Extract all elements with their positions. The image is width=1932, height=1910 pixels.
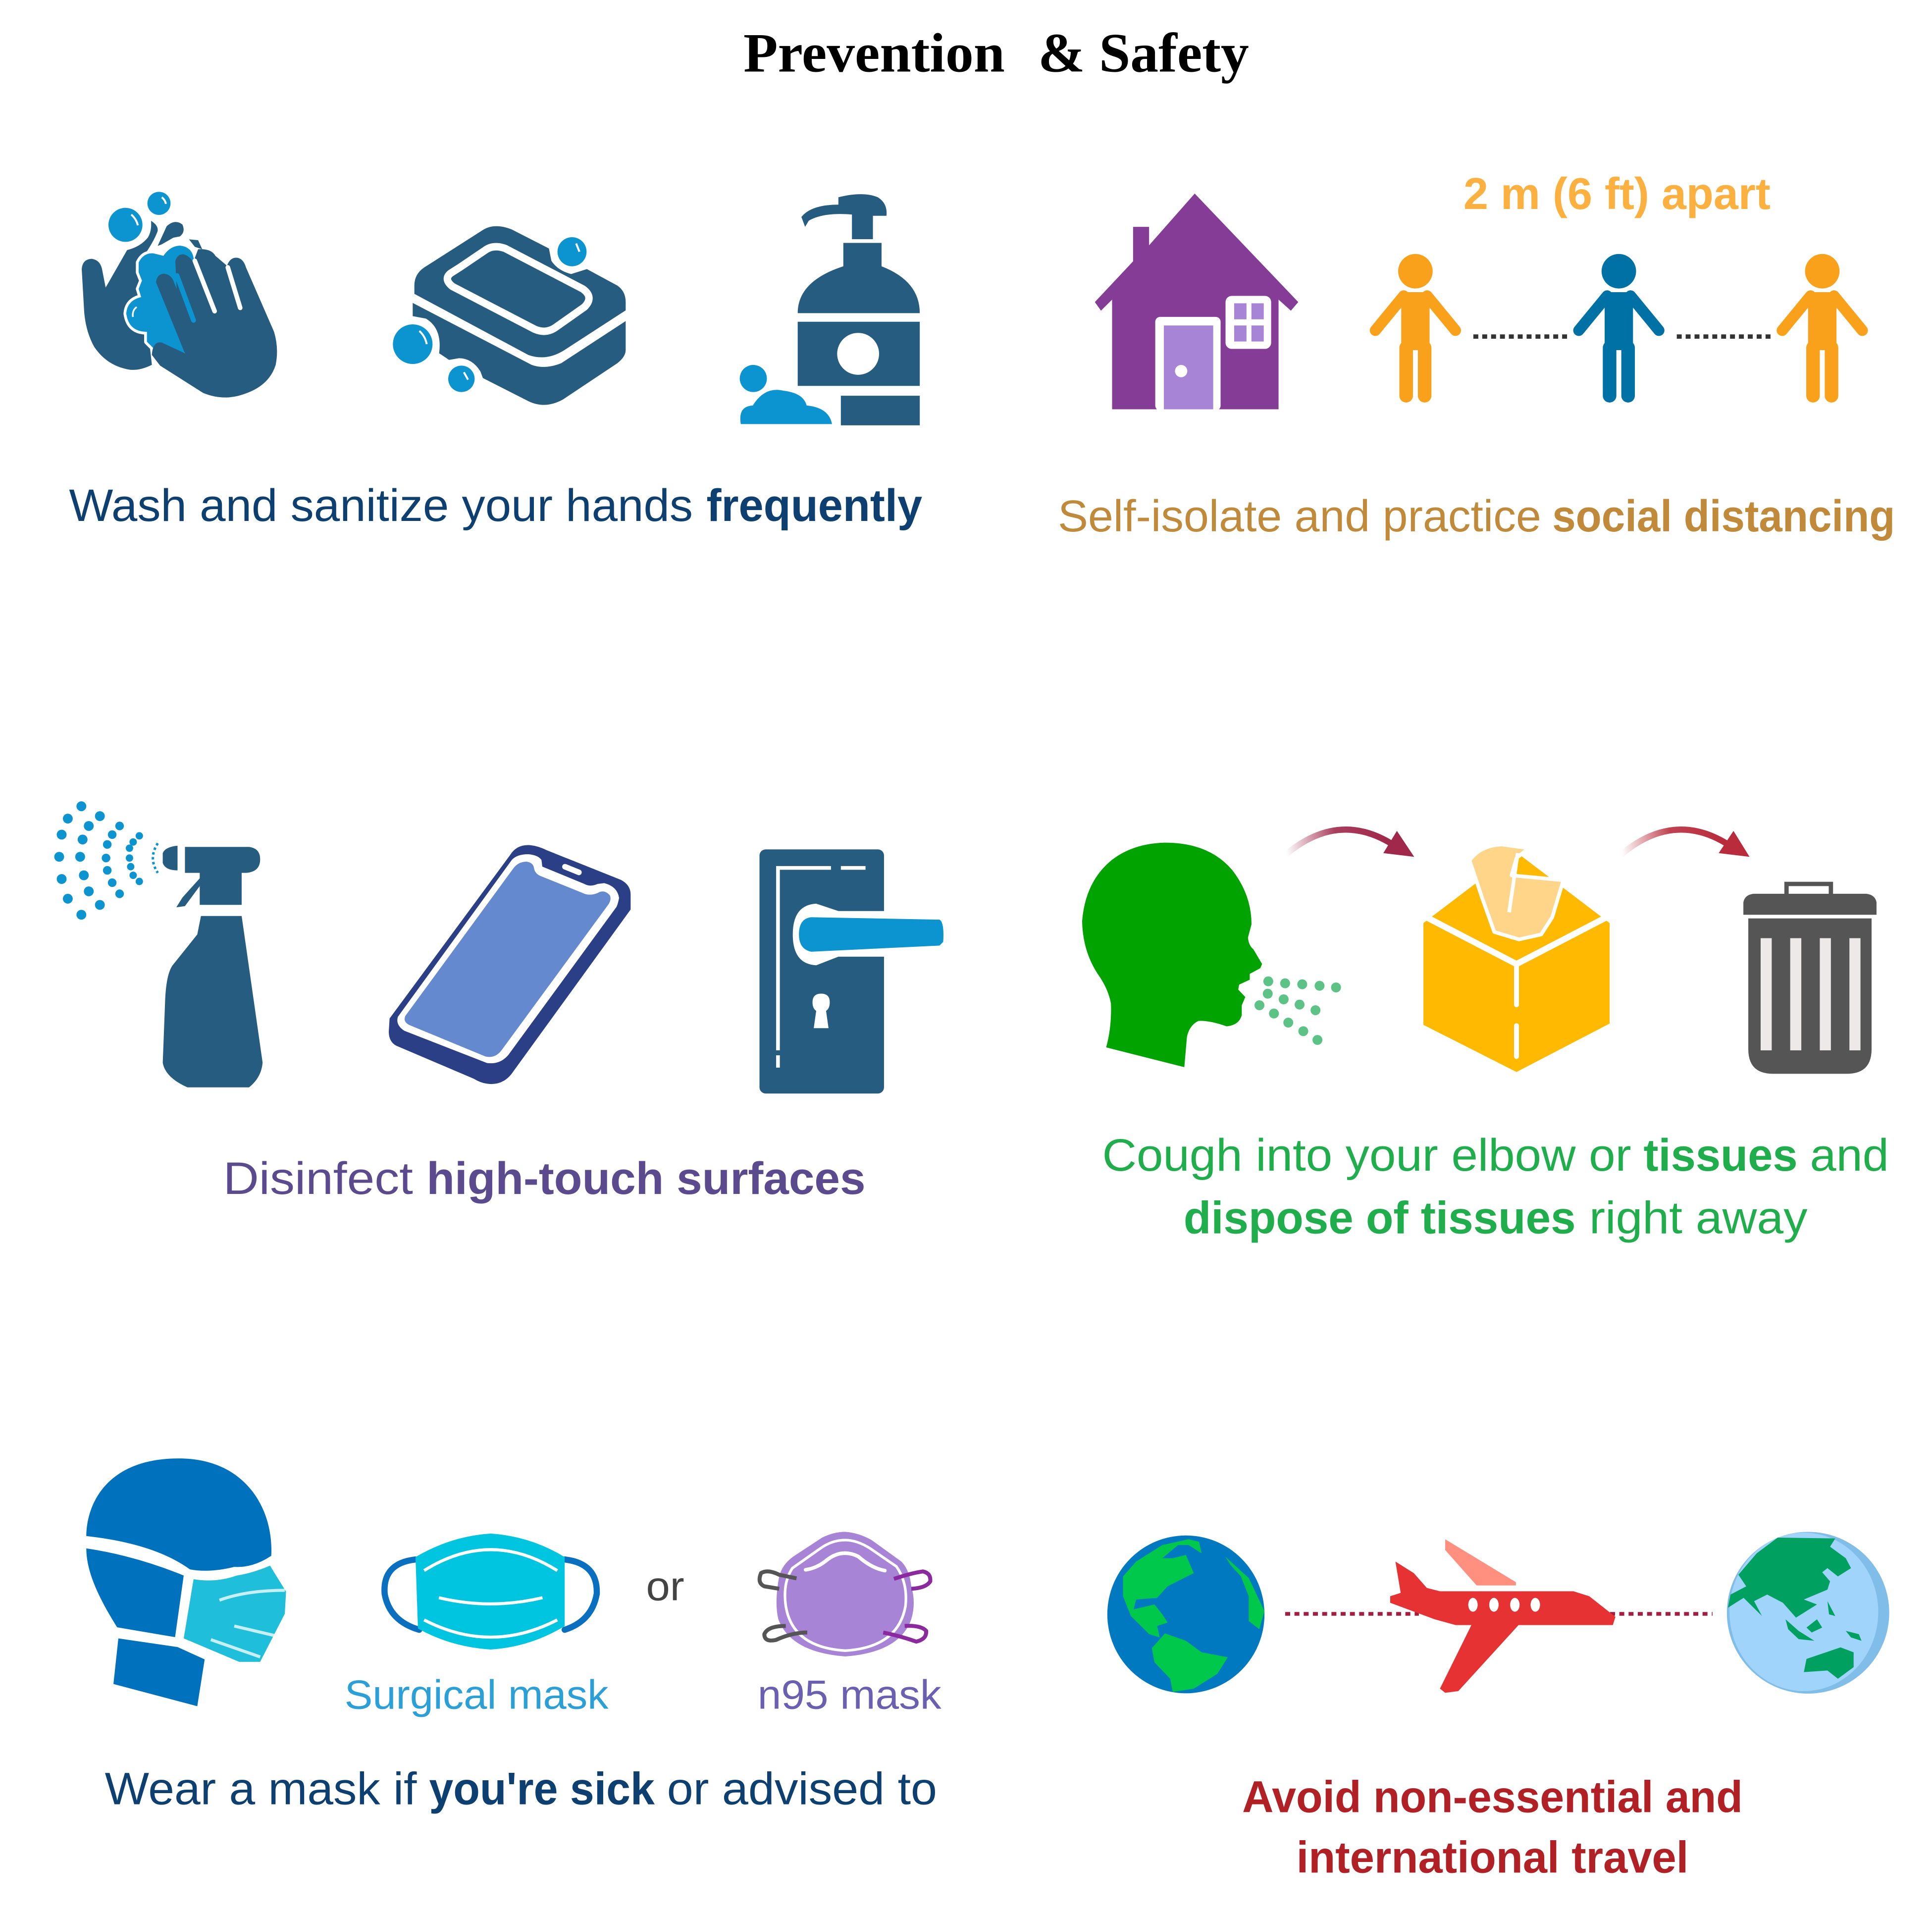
icon: coughing head (1082, 843, 1262, 1067)
caption: disinfect: Disinfect (223, 1153, 413, 1204)
icon: globe asia (1727, 1532, 1889, 1694)
caption: wear a mask: or advised to (667, 1763, 937, 1814)
icon: orange person right (1782, 254, 1862, 396)
icon: n95 mask (760, 1532, 930, 1656)
panel: social distancing (1058, 169, 1895, 541)
panel: disinfect (54, 801, 943, 1204)
caption: wash hands: Wash and sanitize your hands (69, 480, 693, 531)
route line left (1285, 1613, 1419, 1614)
caption: cough (1102, 1130, 1889, 1243)
panel: cough etiquette (1082, 829, 1889, 1243)
panel: wash hands (69, 192, 922, 531)
icon: globe americas (1107, 1536, 1264, 1693)
title: & Safety (1038, 22, 1249, 84)
caption: cough: Cough into your elbow or (1102, 1130, 1631, 1181)
caption: cough: dispose of tissues (1184, 1192, 1576, 1243)
icon: airplane (1390, 1539, 1616, 1693)
icon: tissue box (1424, 844, 1609, 1071)
caption: avoid travel: Avoid non-essential and (1242, 1772, 1743, 1822)
icon: spray bottle (163, 846, 262, 1087)
icon: spray droplets (54, 801, 158, 920)
panel: avoid travel (1107, 1532, 1889, 1882)
route line right (1610, 1613, 1713, 1614)
caption: wear a mask: you're sick (429, 1763, 655, 1814)
icon: soap pump bottle (739, 194, 920, 425)
icon: soap bar (393, 226, 626, 405)
icon: orange person left (1375, 254, 1456, 396)
connector dots (1473, 336, 1773, 337)
panel: masks (86, 1458, 942, 1814)
icon: head with mask (86, 1458, 286, 1706)
icon: door handle (760, 849, 943, 1093)
caption: social distancing: Self-isolate and practice (1058, 491, 1541, 541)
label: surgical mask: Surgical mask (345, 1672, 609, 1717)
arrow: head to tissue (1286, 829, 1414, 857)
arrow: tissue to bin (1621, 829, 1750, 857)
caption: cough: and (1810, 1130, 1889, 1181)
icon: washing hands (82, 192, 277, 398)
caption: wash hands: frequently (706, 480, 922, 531)
caption: wear a mask: Wear a mask if (105, 1763, 417, 1814)
caption: disinfect: high-touch surfaces (426, 1153, 866, 1204)
icon: house (1095, 194, 1298, 411)
title: Prevention (743, 22, 1005, 84)
icon: smartphone (389, 845, 630, 1084)
caption: avoid travel (1242, 1772, 1743, 1882)
icon: trash bin (1743, 884, 1877, 1074)
icon: surgical mask (384, 1534, 597, 1650)
caption: social distancing: social distancing (1552, 491, 1895, 541)
caption: cough: right away (1589, 1192, 1808, 1243)
label: n95 mask: n95 mask (758, 1672, 942, 1717)
caption: avoid travel: international travel (1297, 1833, 1688, 1882)
icon: cough droplets (1254, 977, 1341, 1045)
icon: blue person (1579, 254, 1659, 396)
label: or: or (646, 1564, 684, 1609)
label: distance: 2 m (6 ft) apart (1463, 169, 1771, 218)
caption: cough: tissues (1643, 1130, 1798, 1181)
